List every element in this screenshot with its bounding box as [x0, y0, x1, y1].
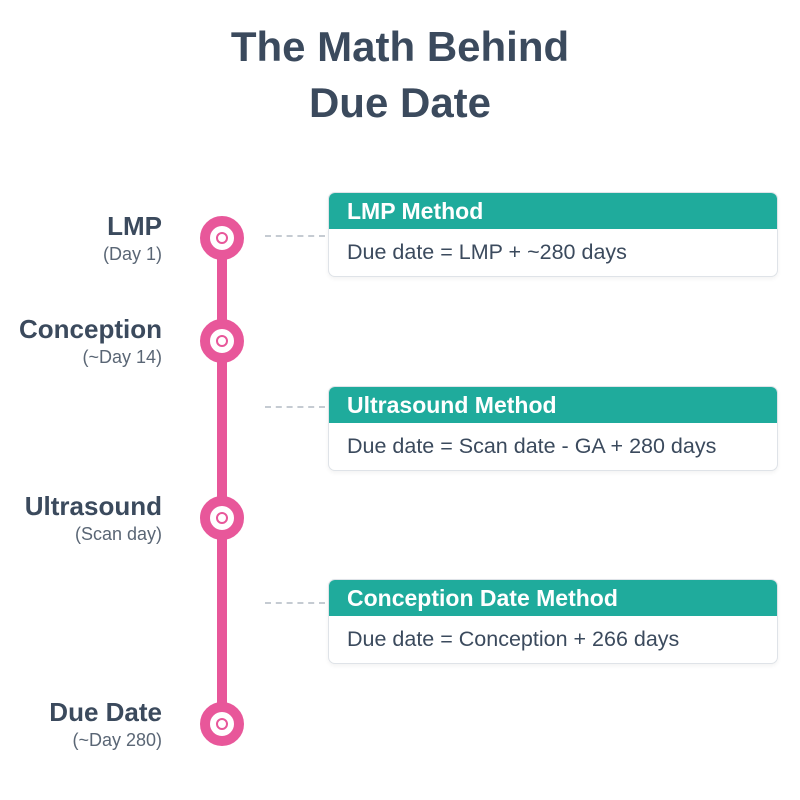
label: Ultrasound: (Scan day) [75, 524, 162, 544]
label: Ultrasound [25, 491, 162, 544]
timeline line [217, 240, 227, 724]
node: LMP [200, 216, 244, 260]
node: Due Date [200, 702, 244, 746]
card: Conception Date Method [328, 579, 778, 664]
title: Due Date [309, 79, 491, 126]
card: Conception Date Method: Due date = Conception + 266 days [347, 627, 679, 651]
node: Conception [200, 319, 244, 363]
label: Due Date [49, 697, 162, 750]
card: Ultrasound Method: Ultrasound Method [347, 392, 557, 418]
label: Conception: Conception [19, 314, 162, 344]
label: LMP: LMP [107, 211, 162, 241]
card: Conception Date Method: Conception Date Method [347, 585, 618, 611]
label: Due Date: Due Date [49, 697, 162, 727]
label: Conception: (~Day 14) [82, 347, 162, 367]
connector: Conception [265, 602, 325, 604]
node: Ultrasound [200, 496, 244, 540]
label: Ultrasound: Ultrasound [25, 491, 162, 521]
title: The Math Behind [231, 23, 569, 70]
label: LMP: (Day 1) [103, 244, 162, 264]
title [231, 23, 569, 126]
card: Ultrasound Method [328, 386, 778, 471]
label: Due Date: (~Day 280) [72, 730, 162, 750]
card: Ultrasound Method: Due date = Scan date - GA + 280 days [347, 434, 716, 458]
card: LMP Method [328, 192, 778, 277]
connector: Ultrasound [265, 406, 325, 408]
label: Conception [19, 314, 162, 367]
label: LMP [103, 211, 162, 264]
card: LMP Method: LMP Method [347, 198, 483, 224]
card: LMP Method: Due date = LMP + ~280 days [347, 240, 627, 264]
connector: LMP [265, 235, 325, 237]
